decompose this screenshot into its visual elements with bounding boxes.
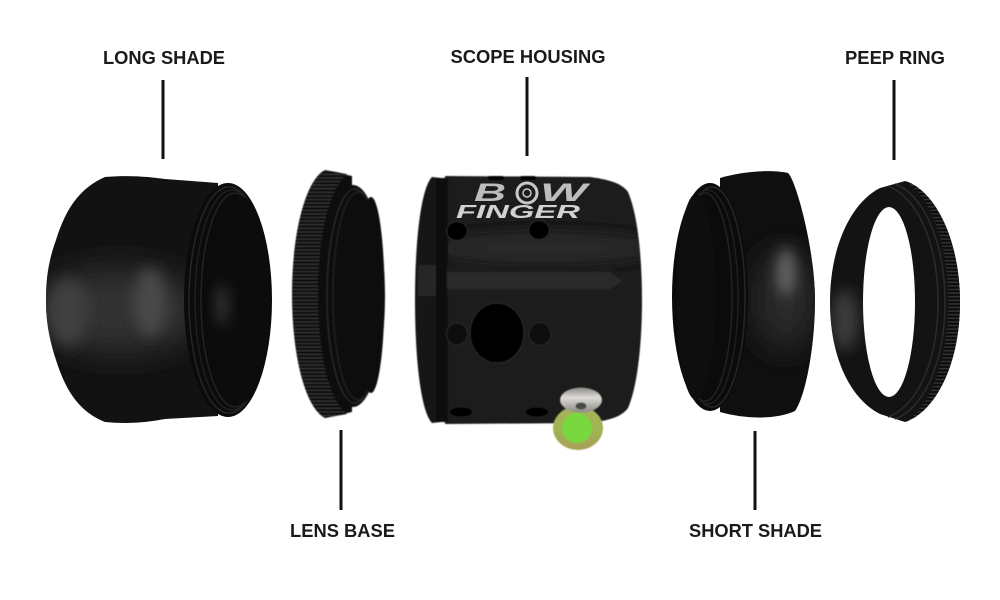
logo: Bow Finger: W bbox=[540, 179, 592, 207]
part: peep ring bbox=[830, 176, 966, 428]
leader line: lens base bbox=[340, 430, 342, 510]
large port bbox=[470, 303, 524, 363]
bottom port left bbox=[450, 408, 472, 416]
screw socket bbox=[576, 402, 586, 410]
logo: Bow Finger: FINGER bbox=[456, 202, 580, 222]
logo: Bow Finger bbox=[456, 179, 592, 222]
label: lens base: LENS BASE bbox=[290, 521, 395, 541]
part: bubble level and screw bbox=[553, 388, 603, 450]
logo: Bow Finger: B bbox=[474, 179, 506, 207]
label: scope housing: SCOPE HOUSING bbox=[450, 47, 606, 67]
leader line: short shade bbox=[754, 431, 756, 510]
housing flange bbox=[415, 177, 450, 423]
part: long shade bbox=[35, 176, 272, 423]
housing top ports bbox=[488, 176, 504, 180]
part: lens base bbox=[292, 170, 385, 418]
housing ridge groove bbox=[447, 266, 629, 296]
level bubble bbox=[562, 413, 592, 443]
label: peep ring: PEEP RING bbox=[845, 48, 945, 68]
label: short shade: SHORT SHADE bbox=[689, 521, 822, 541]
bottom port right bbox=[526, 408, 548, 416]
label: long shade: LONG SHADE bbox=[103, 48, 225, 68]
small port left bbox=[446, 323, 468, 345]
threaded hole right bbox=[528, 220, 550, 240]
logo target bbox=[517, 183, 537, 203]
small port right bbox=[529, 322, 551, 346]
leader line: long shade bbox=[162, 80, 164, 159]
housing body bbox=[445, 176, 642, 424]
threaded hole left bbox=[446, 222, 468, 240]
part: short shade bbox=[672, 171, 817, 418]
leader line: peep ring bbox=[892, 80, 896, 160]
part: scope housing bbox=[415, 176, 655, 424]
silver screw head bbox=[560, 388, 602, 412]
level vial bbox=[553, 406, 603, 450]
leader line: scope housing bbox=[526, 77, 528, 156]
